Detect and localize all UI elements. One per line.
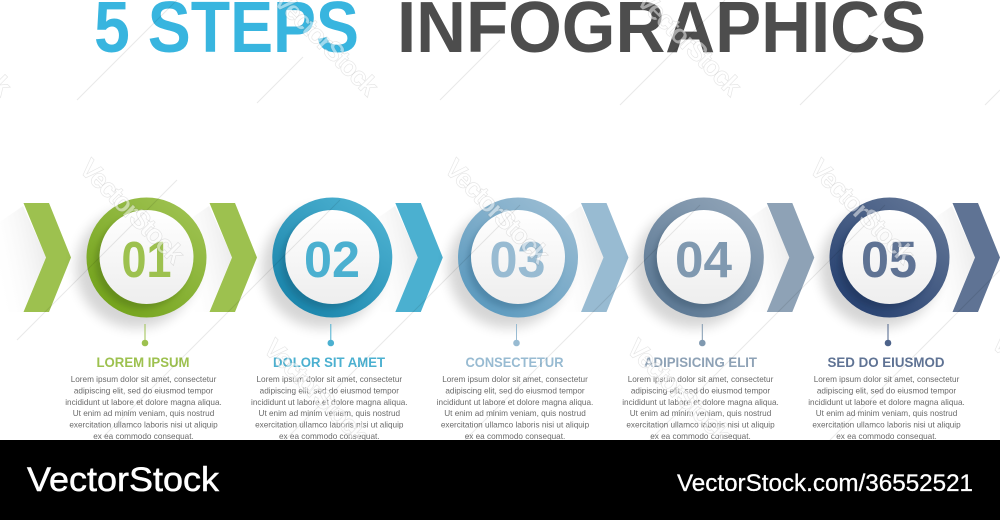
- watermark: VectorStock: [74, 153, 191, 270]
- chevron 4: [767, 203, 814, 312]
- body 4: ex ea commodo consequat.: [650, 432, 751, 441]
- ring 2: [272, 198, 392, 318]
- body 4: adipiscing elit, sed do eiusmod tempor: [631, 386, 770, 395]
- number 4: 04: [675, 231, 733, 288]
- ring 4: [644, 198, 764, 318]
- number 3: 03: [490, 231, 546, 288]
- watermark: VectorStock: [439, 153, 556, 270]
- body 5: [808, 375, 965, 441]
- disc 3: [471, 210, 565, 304]
- title: [94, 0, 926, 68]
- chevron 1a: [24, 203, 71, 312]
- chevron 5: [952, 203, 1000, 312]
- body 5: exercitation ullamco laboris nisi ut aliquip: [812, 421, 961, 430]
- body 3: exercitation ullamco laboris nisi ut aliquip: [441, 421, 590, 430]
- step 3: [437, 198, 628, 441]
- ring 3: [458, 198, 578, 318]
- body 1: ex ea commodo consequat.: [93, 432, 194, 441]
- body 5: adipiscing elit, sed do eiusmod tempor: [817, 386, 956, 395]
- disc 4: [657, 210, 751, 304]
- body 1: Ut enim ad minim veniam, quis nostrud: [73, 409, 215, 418]
- body 3: Lorem ipsum dolor sit amet, consectetur: [442, 375, 588, 384]
- body 2: incididunt ut labore et dolore magna aliqua.: [251, 398, 408, 407]
- body 1: incididunt ut labore et dolore magna aliqua.: [65, 398, 222, 407]
- connector 1: [142, 324, 148, 346]
- body 4: exercitation ullamco laboris nisi ut aliquip: [626, 421, 775, 430]
- ring 5: [830, 198, 950, 318]
- body 2: adipiscing elit, sed do eiusmod tempor: [260, 386, 399, 395]
- label 2: DOLOR SIT AMET: [273, 355, 386, 370]
- body 3: [437, 375, 593, 441]
- label 5: SED DO EIUSMOD: [828, 355, 945, 370]
- step 5: [808, 198, 1000, 441]
- label 3: CONSECTETUR: [466, 355, 564, 370]
- body 2: exercitation ullamco laboris nisi ut aliquip: [255, 421, 404, 430]
- body 2: ex ea commodo consequat.: [279, 432, 380, 441]
- step 4: [622, 198, 814, 441]
- body 2: [251, 375, 408, 441]
- label 1: LOREM IPSUM: [96, 355, 190, 370]
- body 4: Lorem ipsum dolor sit amet, consectetur: [628, 375, 774, 384]
- watermark: VectorStock: [621, 333, 738, 450]
- number 1: 01: [122, 231, 172, 288]
- body 3: Ut enim ad minim veniam, quis nostrud: [444, 409, 586, 418]
- number 5: 05: [861, 231, 917, 288]
- disc 5: [842, 210, 936, 304]
- body 2: Lorem ipsum dolor sit amet, consectetur: [256, 375, 402, 384]
- label 4: ADIPISICING ELIT: [644, 355, 758, 370]
- body 1: Lorem ipsum dolor sit amet, consectetur: [71, 375, 217, 384]
- chevron 3: [581, 203, 628, 312]
- chevron 1b: [210, 203, 257, 312]
- body 4: incididunt ut labore et dolore magna aliqua.: [622, 398, 779, 407]
- body 4: [622, 375, 779, 441]
- connector 3: [513, 324, 520, 346]
- number 2: 02: [304, 231, 360, 288]
- watermark: VectorStock: [804, 153, 921, 270]
- body 5: Ut enim ad minim veniam, quis nostrud: [816, 409, 958, 418]
- step 2: [251, 198, 443, 441]
- disc 1: [100, 210, 194, 304]
- body 3: adipiscing elit, sed do eiusmod tempor: [445, 386, 585, 395]
- body 3: incididunt ut labore et dolore magna aliqua.: [437, 398, 593, 407]
- body 1: exercitation ullamco laboris nisi ut aliquip: [69, 421, 218, 430]
- connector 2: [328, 324, 334, 346]
- body 3: ex ea commodo consequat.: [465, 432, 565, 441]
- footer url: VectorStock.com/36552521: [677, 470, 973, 497]
- disc 2: [285, 210, 379, 304]
- step 1: [0, 198, 257, 441]
- body 2: Ut enim ad minim veniam, quis nostrud: [259, 409, 400, 418]
- body 5: incididunt ut labore et dolore magna aliqua.: [808, 398, 965, 407]
- connector 4: [699, 324, 706, 346]
- connector 5: [885, 324, 891, 346]
- ring 1: [86, 198, 206, 318]
- body 1: [65, 375, 222, 441]
- body 4: Ut enim ad minim veniam, quis nostrud: [630, 409, 772, 418]
- watermark: VectorStock: [258, 333, 375, 450]
- footer bar: [0, 440, 1000, 520]
- chevron 2: [395, 203, 443, 312]
- footer logo: VectorStock: [27, 461, 220, 499]
- body 5: Lorem ipsum dolor sit amet, consectetur: [814, 375, 960, 384]
- body 5: ex ea commodo consequat.: [836, 432, 937, 441]
- body 1: adipiscing elit, sed do eiusmod tempor: [74, 386, 213, 395]
